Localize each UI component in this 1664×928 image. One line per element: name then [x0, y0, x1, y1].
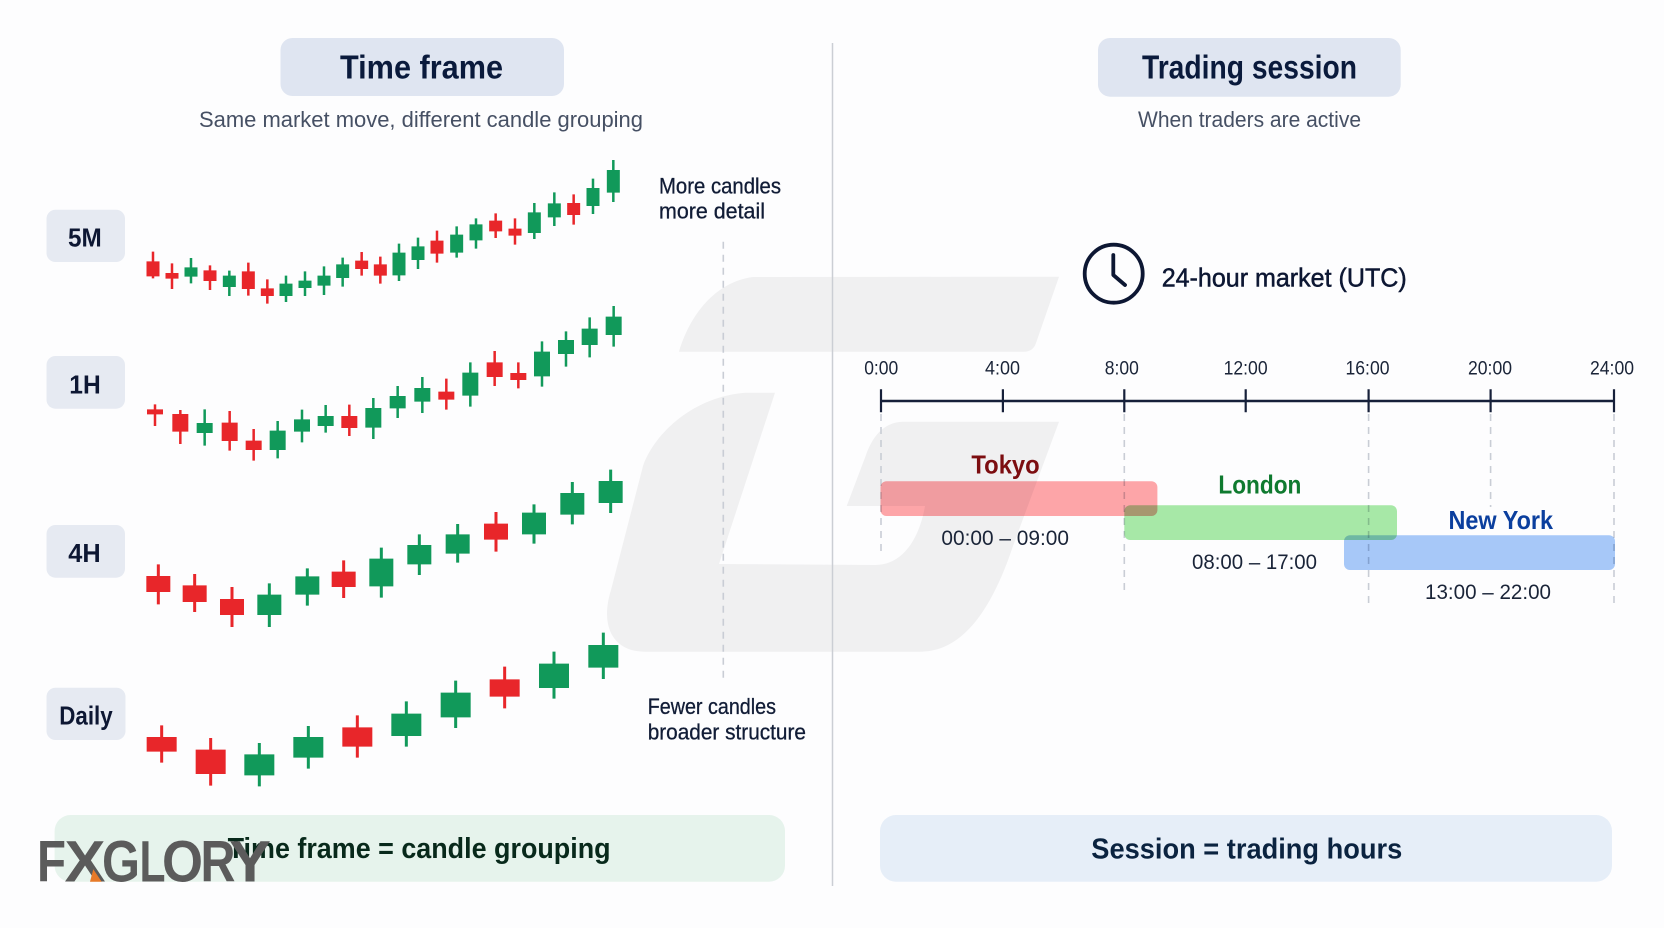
summary bar: session	[880, 815, 1612, 882]
logo: FXGLORY	[37, 830, 271, 895]
callout: more candles	[659, 173, 781, 223]
label: 5M	[46, 210, 125, 262]
logo: FXGLORY: R	[200, 830, 236, 895]
timeline axis: 12:00	[1224, 358, 1268, 379]
heading: trading session	[1098, 38, 1401, 97]
callout: fewer candles: broader structure	[648, 719, 806, 744]
session: New York: New York	[1448, 505, 1553, 535]
session: New York: 13:00 – 22:00	[1425, 581, 1551, 604]
summary bar: time frame	[55, 815, 785, 882]
timeline axis	[864, 358, 1634, 412]
logo: FXGLORY: O	[162, 830, 203, 895]
watermark logo	[607, 277, 1059, 652]
label: 4H: 4H	[68, 538, 101, 568]
session: New York	[1344, 505, 1615, 604]
text: 24-hour market: 24-hour market (UTC)	[1162, 263, 1407, 293]
candlestick row: 1H	[155, 306, 614, 461]
label: 4H	[46, 525, 125, 578]
logo: FXGLORY: L	[140, 830, 166, 895]
heading: trading session: Trading session	[1142, 49, 1357, 86]
timeline axis: 0:00	[864, 358, 898, 379]
candlestick row: 4H	[158, 470, 611, 627]
heading: time frame: Time frame	[340, 48, 503, 86]
panel: time frame	[37, 38, 806, 895]
callout: fewer candles	[648, 694, 806, 744]
candlestick row: 5M	[153, 160, 613, 304]
candlestick row: Daily	[162, 633, 603, 786]
logo: FXGLORY: X	[64, 830, 106, 895]
label: 1H: 1H	[69, 369, 101, 399]
session: Tokyo: Tokyo	[971, 449, 1040, 479]
label: 5M: 5M	[68, 223, 102, 253]
callout: more candles: More candles	[659, 173, 781, 198]
subtitle: trading session: When traders are active	[1138, 107, 1361, 132]
timeline axis: 24:00	[1590, 358, 1634, 379]
callout: more candles: more detail	[659, 198, 765, 223]
timeline axis: 16:00	[1346, 358, 1390, 379]
panel: trading session	[864, 38, 1634, 882]
label: Daily	[46, 688, 126, 740]
session: London: 08:00 – 17:00	[1192, 551, 1317, 574]
summary bar: time frame: Time frame = candle grouping	[228, 833, 611, 865]
session: London: London	[1218, 469, 1301, 499]
session: Tokyo	[880, 449, 1157, 550]
heading: time frame	[280, 38, 564, 96]
subtitle: time frame: Same market move, different candle grouping	[199, 107, 643, 132]
label: 1H	[46, 356, 125, 409]
timeline axis: 8:00	[1105, 358, 1139, 379]
summary bar: session: Session = trading hours	[1091, 834, 1402, 866]
icon: clock	[1085, 245, 1143, 303]
timeline axis: 4:00	[985, 358, 1020, 379]
callout: fewer candles: Fewer candles	[648, 694, 776, 719]
label: Daily: Daily	[59, 700, 113, 730]
timeline axis: 20:00	[1468, 358, 1512, 379]
logo: FXGLORY: Y	[229, 830, 271, 895]
logo: FXGLORY: F	[37, 830, 66, 895]
logo: FXGLORY: G	[102, 830, 140, 895]
session: London	[1124, 469, 1397, 574]
session: Tokyo: 00:00 – 09:00	[941, 527, 1069, 550]
